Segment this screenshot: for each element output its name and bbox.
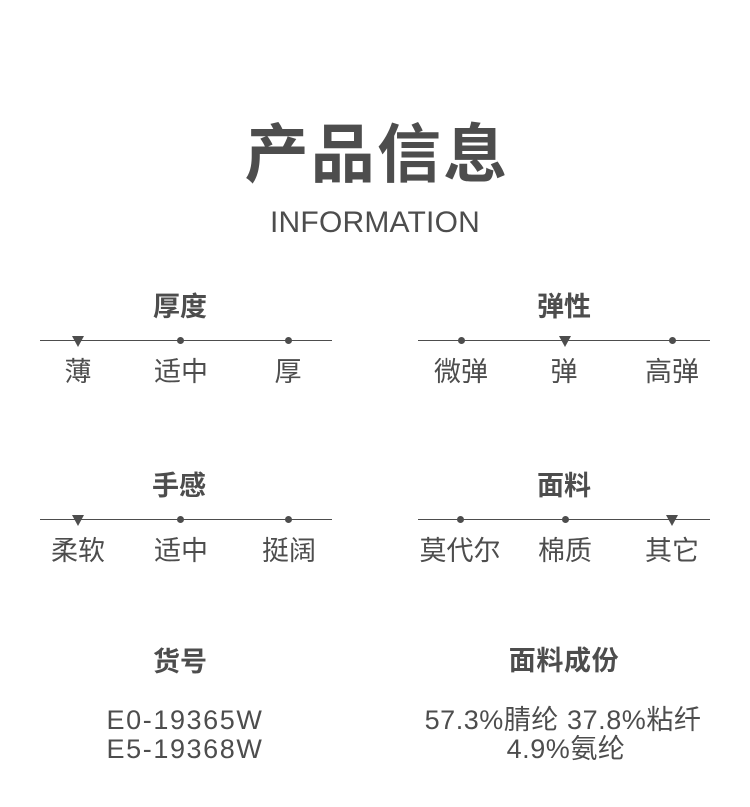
marker: soft selected [72,515,84,526]
label: cotton: 棉质 [538,536,592,566]
label: crisp: 挺阔 [262,536,316,566]
marker: thin selected [72,336,84,347]
dot: thick [285,337,292,344]
panel: thickness [40,292,332,387]
panel: hand feel [40,471,332,566]
dot: cotton [562,516,569,523]
label: high stretch: 高弹 [645,357,699,387]
panel: elasticity [418,292,710,387]
dot: medium [177,516,184,523]
heading: item number: 货号 [153,647,207,677]
label: stretch: 弹 [550,357,578,387]
item number values [107,705,263,764]
item number values: E0-19365W [107,705,263,735]
dot: modal [457,516,464,523]
dot: crisp [285,516,292,523]
scale line: elasticity [418,340,710,341]
composition values [425,705,701,764]
label: slight stretch: 微弹 [434,357,488,387]
panel: fabric [418,471,710,566]
item number values: E5-19368W [107,734,263,764]
marker: other selected [666,515,678,526]
dot: slight stretch [458,337,465,344]
panel: composition [425,646,701,764]
label: thick: 厚 [274,357,302,387]
scale line: thickness [40,340,332,341]
label: medium: 适中 [154,357,208,387]
subtitle: INFORMATION [270,206,480,239]
dot: medium [177,337,184,344]
dot: high stretch [669,337,676,344]
heading: elasticity: 弹性 [537,292,591,322]
scale line: fabric [418,519,710,520]
label: medium: 适中 [154,536,208,566]
label: soft: 柔软 [51,536,105,566]
label: modal: 莫代尔 [420,536,500,566]
heading: thickness: 厚度 [153,292,207,322]
title: 产品信息 [245,119,509,191]
marker: stretch selected [559,336,571,347]
composition values: 4.9%氨纶 [507,734,625,764]
scale line: hand feel [40,519,332,520]
label: thin: 薄 [64,357,92,387]
heading: composition: 面料成份 [509,646,619,676]
label: other: 其它 [645,536,699,566]
composition values: 57.3%腈纶 37.8%粘纤 [425,705,701,735]
heading: fabric: 面料 [537,471,591,501]
panel: item number [107,647,263,764]
heading: hand feel: 手感 [152,471,206,501]
